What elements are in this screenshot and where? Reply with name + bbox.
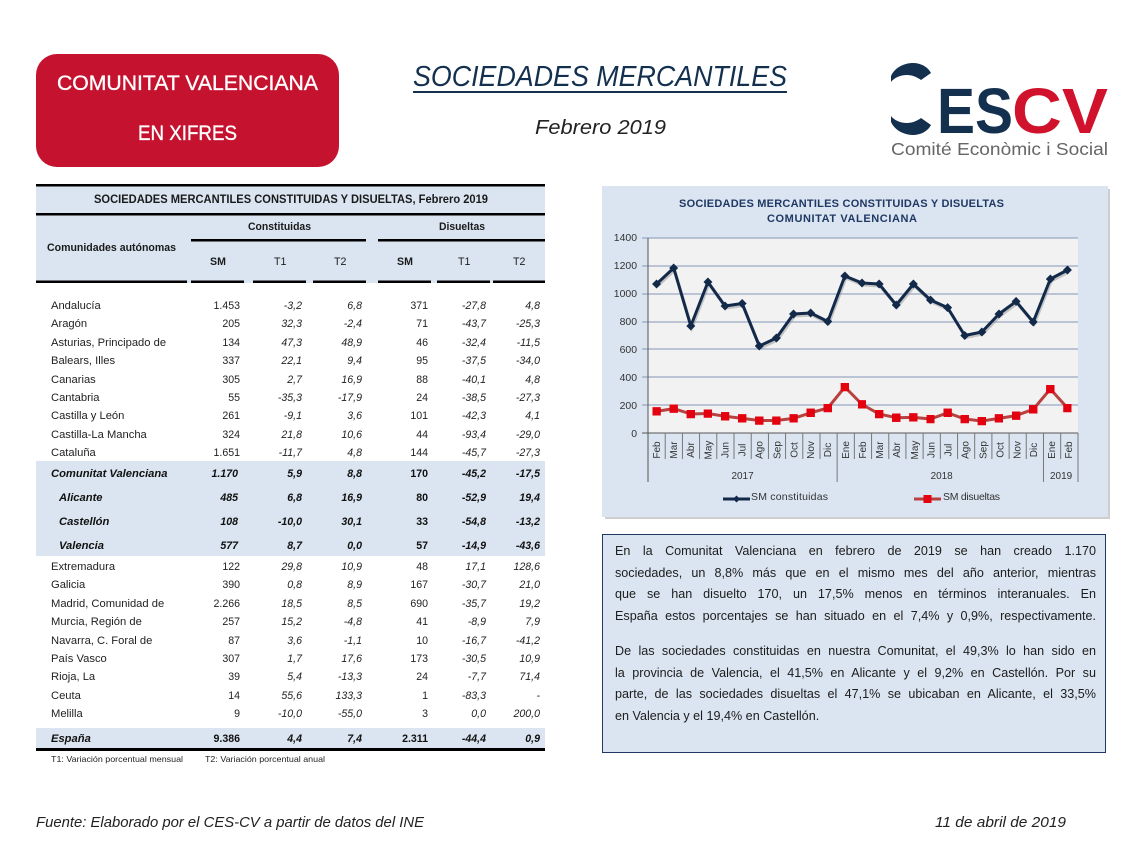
x axis month labels [652,441,1075,459]
row: Castilla y León: -9,1 [284,410,302,422]
red badge: Comunitat Valenciana en xifres [36,54,339,167]
row: Aragón [51,318,540,330]
row: España [51,733,540,745]
row: Melilla: 9 [234,708,240,720]
chart title: SOCIEDADES MERCANTILES CONSTITUIDAS Y DISUELTAS [679,198,1004,210]
table footnote [51,754,325,764]
row: Extremadura [51,561,540,573]
row: Melilla: Melilla [51,708,83,720]
table header: T2 [513,256,525,268]
row: Andalucía: -27,8 [462,300,486,312]
row: Valencia: 577 [220,540,239,552]
row: Melilla: 3 [422,708,428,720]
row: Valencia: 57 [416,540,428,552]
chart legend: SM constituidas [751,491,828,503]
row: Galicia: 21,0 [518,579,540,591]
row: Canarias: 16,9 [341,374,362,386]
row: España: 9.386 [213,733,240,745]
row: Galicia: Galicia [51,579,86,591]
row: Cantabria: -35,3 [278,392,302,404]
row: Galicia: 8,9 [347,579,362,591]
row: Melilla: 0,0 [471,708,486,720]
chart panel: line chart constituidas y disueltas [602,186,1110,519]
row: España: 7,4 [347,733,362,745]
table: sociedades mercantiles por comunidad [36,184,545,764]
row: Cataluña: -11,7 [279,447,303,459]
row: Balears: 9,4 [347,355,362,367]
row: Murcia: -4,8 [344,616,362,628]
row: Andalucía: 4,8 [525,300,540,312]
logo: CES-CV: Comité Econòmic i Social [891,139,1108,159]
paragraph 2: en Valencia y el 19,4% en Castellón. [615,709,819,723]
row: Canarias: -40,1 [462,374,486,386]
row: Rioja: -7,7 [468,671,487,683]
row: Castilla y León: 4,1 [525,410,540,422]
row: Aragón: -2,4 [344,318,362,330]
row: Alicante: 6,8 [287,492,302,504]
row: Alicante [58,492,540,504]
row: Balears: -37,5 [462,355,486,367]
row: País Vasco: 10,9 [519,653,540,665]
source note: Fuente: Elaborado por el CES-CV a partir de datos del INE [36,814,425,831]
y axis labels: 0 [631,429,637,440]
row: Castellón [59,516,540,528]
row: Ceuta: 14 [228,690,240,702]
row: España: -44,4 [462,733,486,745]
row: Cantabria: 55 [228,392,240,404]
row: Castellón: -54,8 [462,516,486,528]
x axis year labels [731,471,1073,482]
paragraph 2: De las sociedades constituidas en nuestra Comunitat, el 49,3% lo han sido en [615,644,1096,658]
row: Alicante: 16,9 [341,492,362,504]
row: Ceuta [51,690,540,702]
table header: Constituidas [248,221,311,233]
row: Castilla y León: 3,6 [347,410,362,422]
x axis month labels: Jul [944,444,955,456]
y axis labels: 1200 [614,261,637,272]
row: Rioja [51,671,540,683]
row: Rioja: 5,4 [287,671,302,683]
row: Alicante: 485 [219,492,239,504]
row: Rioja: 24 [416,671,428,683]
row: Madrid: 2.266 [213,598,240,610]
row: Asturias: 47,3 [281,337,302,349]
text panel: commentary [602,534,1106,753]
row: Castellón: -10,0 [278,516,302,528]
red badge: Comunitat Valenciana en xifres: EN XIFRES [138,122,237,145]
row: Comunitat Valenciana [51,468,541,480]
row: Murcia: -8,9 [468,616,486,628]
row: Cataluña: -27,3 [516,447,540,459]
x axis month labels: Feb [858,441,869,459]
table header: T2 [334,256,346,268]
paragraph 1: sociedades, un 8,8% más que en el mismo mes del año anterior, mientras [615,566,1096,580]
x axis month labels: Dic [823,443,834,457]
x axis month labels: Dic [1029,443,1040,457]
chart title: COMUNITAT VALENCIANA [767,213,917,225]
x axis month labels: Abr [686,442,697,458]
row: Murcia: 41 [416,616,428,628]
row: Navarra: -41,2 [516,635,540,647]
row: Castilla-La Mancha: -29,0 [516,429,540,441]
row: Andalucía: 371 [410,300,428,312]
row: Rioja: -13,3 [338,671,362,683]
row: Canarias: Canarias [51,374,96,386]
row: Madrid: Madrid, Comunidad de [51,598,164,610]
paragraph 2: la provincia de Valencia, el 41,5% en Alicante y el 9,2% en Castellón. Por su [615,666,1096,680]
paragraph 1: que se han disuelto 170, un 17,5% menos en términos interanuales. En [615,587,1096,601]
row: Canarias: 305 [222,374,240,386]
row: Canarias [51,374,540,386]
table footnote: T2: Variación porcentual anual [205,754,325,764]
row: Extremadura: 48 [416,561,428,573]
row: Andalucía: 1.453 [213,300,240,312]
x axis month labels: Nov [1012,441,1023,459]
x axis month labels: Ene [1047,441,1058,459]
row: Madrid: 18,5 [281,598,302,610]
x axis month labels: Mar [875,441,886,459]
logo: CES-CV: CV [1012,75,1108,147]
row: Cataluña [51,447,540,459]
table header: SM [397,256,413,268]
x axis month labels: Oct [789,442,800,458]
row: Galicia [51,579,540,591]
row: Canarias: 4,8 [525,374,540,386]
x axis month labels: May [704,441,715,459]
row: Asturias: 46 [416,337,428,349]
row: Ceuta: 1 [422,690,428,702]
x axis month labels: Ene [841,441,852,459]
row: País Vasco: País Vasco [51,653,107,665]
row: Andalucía: 6,8 [347,300,362,312]
row: Ceuta: 55,6 [281,690,302,702]
row: Aragón: -43,7 [462,318,487,330]
row: Murcia: 15,2 [281,616,302,628]
row: Melilla: 200,0 [512,708,540,720]
row: Navarra [51,635,540,647]
row: Castilla-La Mancha: 44 [416,429,428,441]
x axis month labels: Ago [961,441,972,459]
row: Castilla y León: 261 [222,410,240,422]
x axis month labels: Nov [806,441,817,459]
row: Extremadura: Extremadura [51,561,116,573]
logo: CES-CV [891,63,1108,159]
table header: T1 [274,256,286,268]
row: Comunitat Valenciana: 1.170 [211,468,238,480]
row: Valencia: 8,7 [287,540,303,552]
row: Navarra: -16,7 [462,635,487,647]
row: Navarra: 3,6 [287,635,302,647]
row: Aragón: -25,3 [516,318,540,330]
row: País Vasco: 1,7 [287,653,303,665]
row: Comunitat Valenciana: -45,2 [462,468,486,480]
row: Balears: 22,1 [280,355,302,367]
row: Andalucía: Andalucía [51,300,102,312]
band: España [36,728,545,748]
table header: SOCIEDADES MERCANTILES CONSTITUIDAS Y DISUELTAS, Febrero 2019 [94,194,488,206]
row: Valencia: -14,9 [462,540,486,552]
table footnote: T1: Variación porcentual mensual [51,754,183,764]
row: País Vasco: 307 [222,653,240,665]
x axis month labels: Sep [978,441,989,459]
row: Asturias: Asturias, Principado de [51,337,166,349]
row: Castellón: -13,2 [516,516,540,528]
row: Asturias [51,337,540,349]
row: Cantabria [51,392,540,404]
row: Ceuta: Ceuta [51,690,82,702]
row: Andalucía [51,300,540,312]
x axis month labels: Jun [927,442,938,458]
y axis labels: 200 [620,401,637,412]
row: Cantabria: Cantabria [51,392,100,404]
table header: SM [210,256,226,268]
x axis year labels: 2018 [931,471,953,482]
row: Melilla: -55,0 [338,708,362,720]
row: Cantabria: -38,5 [462,392,486,404]
row: Castellón: 33 [416,516,428,528]
row: Rioja: 71,4 [519,671,540,683]
row: Castilla-La Mancha: 21,8 [280,429,302,441]
y axis labels: 1000 [614,289,637,300]
row: Extremadura: 17,1 [465,561,486,573]
row: Asturias: 134 [222,337,240,349]
y axis labels: 400 [620,373,637,384]
table header [36,184,545,283]
chart legend [723,491,1000,503]
row: Cataluña: Cataluña [51,447,97,459]
x axis year labels: 2019 [1050,471,1073,482]
row: Asturias: -32,4 [462,337,486,349]
x axis month labels: Ago [754,441,765,459]
row: Alicante: 19,4 [519,492,540,504]
x axis year labels: 2017 [731,471,754,482]
row: Castilla-La Mancha: -93,4 [462,429,486,441]
band: Comunitat Valenciana [36,461,545,556]
table header: Comunidades autónomas [47,242,176,254]
row: Balears: 95 [416,355,428,367]
row: Castilla y León: -42,3 [462,410,486,422]
row: Cataluña: 1.651 [213,447,240,459]
row: Navarra: -1,1 [344,635,362,647]
x axis month labels: Mar [669,441,680,459]
red badge: Comunitat Valenciana en xifres: COMUNITAT VALENCIANA [57,72,318,95]
subtitle: date: Febrero 2019 [535,117,666,139]
row: Comunitat Valenciana: 170 [410,468,428,480]
row: Melilla [51,708,540,720]
plot area with axes [614,233,1078,482]
row: Extremadura: 29,8 [280,561,302,573]
chart title [679,198,1004,225]
row: Aragón: 71 [416,318,428,330]
row: Canarias: 2,7 [286,374,303,386]
row: Castellón: 108 [220,516,238,528]
y axis labels: 800 [620,317,637,328]
row: Asturias: -11,5 [517,337,540,349]
paragraph 2: parte, de las sociedades disueltas el 47,1% se ubicaban en Alicante, el 33,5% [615,687,1096,701]
row: Andalucía: -3,2 [284,300,302,312]
row: Asturias: 48,9 [341,337,362,349]
row: Galicia: 167 [410,579,428,591]
table header: T1 [458,256,470,268]
row: Navarra: 10 [416,635,428,647]
x axis month labels: Abr [892,442,903,458]
paragraph 1: España estos porcentajes se han situado en el 7,4% y 0,9%, respectivamente. [615,609,1096,623]
row: Cataluña: 144 [410,447,428,459]
row: Castilla y León: 101 [410,410,428,422]
row: Balears [51,355,540,367]
row: Balears: 337 [222,355,240,367]
row: Castilla y León [51,410,540,422]
row: Murcia [51,616,540,628]
y axis labels: 1400 [614,233,637,244]
row: España: 4,4 [286,733,302,745]
row: Castilla-La Mancha: Castilla-La Mancha [51,429,148,441]
logo: CES-CV: ES [937,75,1013,147]
row: Galicia: 0,8 [287,579,302,591]
row: Murcia: 7,9 [525,616,540,628]
row: Castilla y León: Castilla y León [51,410,124,422]
row: Navarra: Navarra, C. Foral de [51,635,152,647]
x axis month labels: Jul [738,444,749,456]
row: Alicante: 80 [416,492,428,504]
row: Cataluña: 4,8 [347,447,362,459]
row: Balears: -34,0 [516,355,540,367]
table header: Disueltas [439,221,485,233]
row: Castellón: Castellón [59,516,110,528]
row: Canarias: 88 [416,374,428,386]
row: Comunitat Valenciana: 5,9 [287,468,302,480]
row: Navarra: 87 [228,635,240,647]
x axis month labels: Feb [652,441,663,459]
row: Extremadura: 128,6 [513,561,540,573]
row: Extremadura: 10,9 [341,561,362,573]
row: Valencia: Valencia [59,540,104,552]
row: Balears: Balears, Illes [51,355,115,367]
row: País Vasco: 173 [410,653,428,665]
row: Alicante: Alicante [58,492,103,504]
row: Madrid: 19,2 [519,598,540,610]
x axis month labels: Feb [1064,441,1075,459]
row: España: España [51,733,91,745]
y axis labels: 600 [620,345,637,356]
paragraph 2 [615,644,1096,723]
row: Comunitat Valenciana: Comunitat Valenciana [51,468,167,480]
row: País Vasco: 17,6 [341,653,362,665]
row: Madrid: -35,7 [462,598,487,610]
x axis month labels: Oct [995,442,1006,458]
row: España: 2.311 [402,733,428,745]
row: Ceuta: -83,3 [462,690,486,702]
row: País Vasco: -30,5 [462,653,486,665]
paragraph 1 [615,544,1096,623]
row: Castilla-La Mancha [51,429,540,441]
row: Castellón: 30,1 [341,516,362,528]
row: Galicia: -30,7 [462,579,487,591]
row: Extremadura: 122 [222,561,240,573]
row: Ceuta: - [536,690,540,702]
row: Aragón: 32,3 [281,318,302,330]
row: Cataluña: -45,7 [462,447,487,459]
row: Cantabria: 24 [416,392,428,404]
row: Castilla-La Mancha: 10,6 [341,429,362,441]
row: Aragón: 205 [222,318,240,330]
row: Valencia [59,540,540,552]
y axis labels [614,233,637,440]
chart legend: SM disueltas [943,491,1000,503]
series: SM disueltas [657,387,1067,421]
row: Valencia: -43,6 [516,540,540,552]
row: Alicante: -52,9 [462,492,486,504]
row: Rioja: 39 [228,671,240,683]
publication date: 11 de abril de 2019 [935,814,1067,831]
row: Cantabria: -17,9 [338,392,362,404]
row: Madrid: 690 [410,598,428,610]
row: Castilla-La Mancha: 324 [222,429,240,441]
row: Galicia: 390 [222,579,240,591]
row: Murcia: 257 [222,616,240,628]
row: País Vasco [51,653,540,665]
row: Rioja: Rioja, La [51,671,96,683]
x axis month labels: Sep [772,441,783,459]
row: Cantabria: -27,3 [516,392,540,404]
row: Madrid: 8,5 [347,598,362,610]
x axis month labels: Jun [721,442,732,458]
row: Valencia: 0,0 [347,540,362,552]
row: Ceuta: 133,3 [335,690,362,702]
row: Comunitat Valenciana: 8,8 [347,468,362,480]
row: España: 0,9 [525,733,540,745]
row: Murcia: Murcia, Región de [51,616,142,628]
x axis month labels: May [910,441,921,459]
series: SM constituidas [657,268,1068,348]
paragraph 1: En la Comunitat Valenciana en febrero de 2019 se han creado 1.170 [615,544,1096,558]
row: Madrid [51,598,540,610]
title: SOCIEDADES MERCANTILES [413,61,788,93]
row: Comunitat Valenciana: -17,5 [516,468,541,480]
row: Melilla: -10,0 [278,708,302,720]
row: Aragón: Aragón [51,318,87,330]
